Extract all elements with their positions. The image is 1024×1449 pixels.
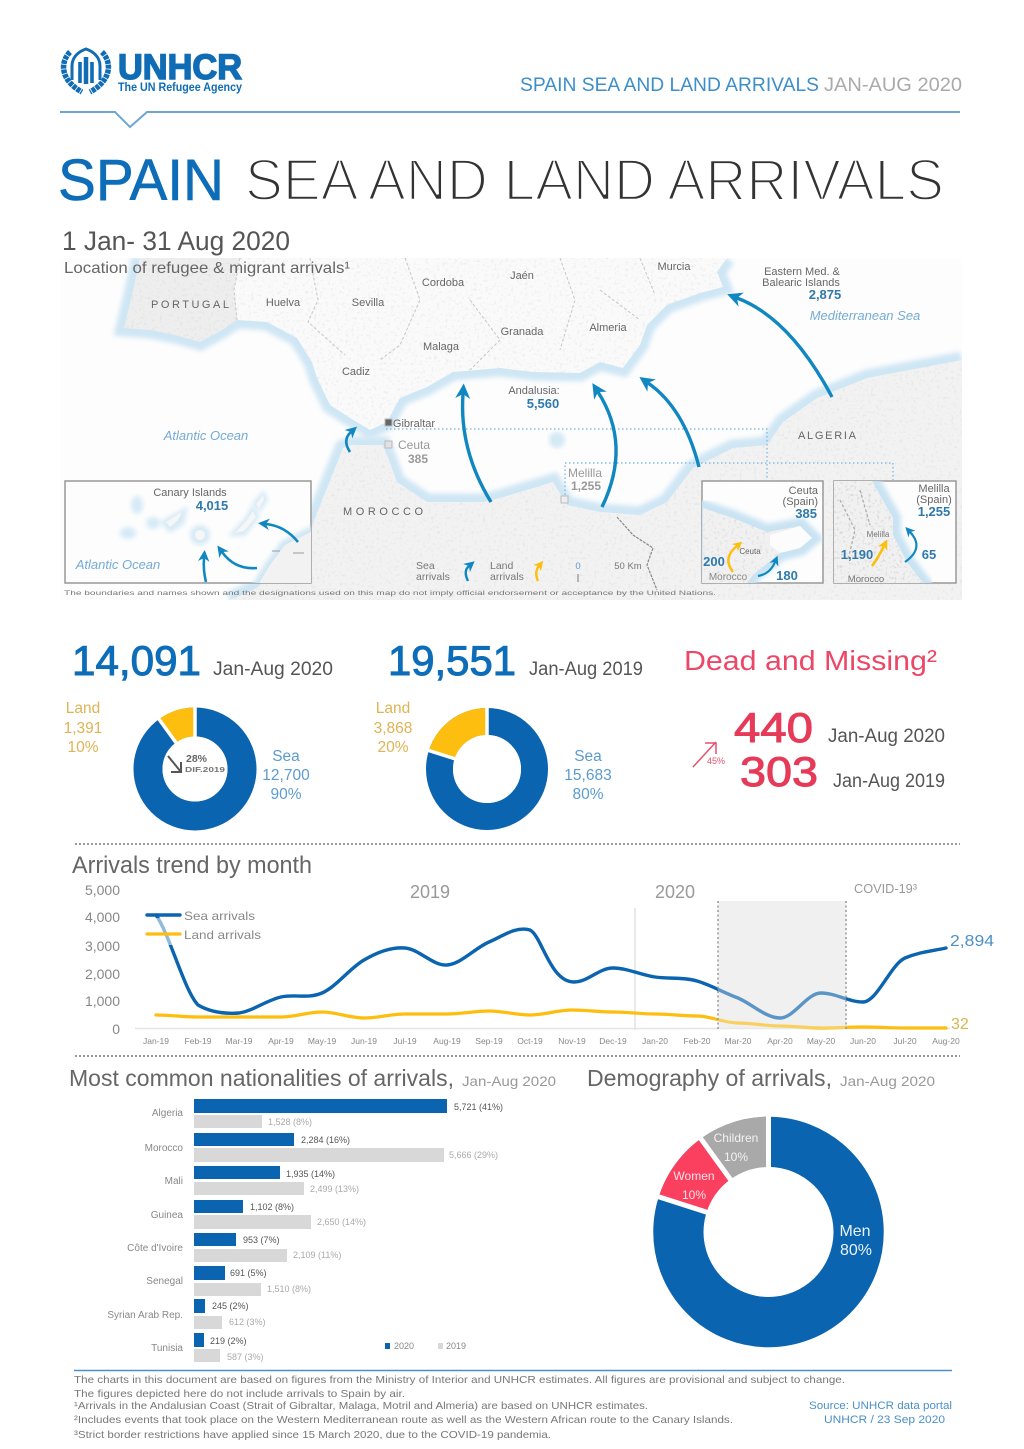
header running title: SPAIN SEA AND LAND ARRIVALS <box>520 75 819 96</box>
footer rule <box>74 1370 952 1372</box>
x axis labels: Mar-19 <box>226 1036 253 1046</box>
inset: Ceuta: 180 <box>776 568 798 583</box>
period labels: COVID-19³ <box>854 881 918 896</box>
source credit <box>809 1400 952 1426</box>
header running title <box>520 75 962 96</box>
sea labels: Atlantic Ocean <box>163 428 248 443</box>
stat: total arrivals 2019: 19,551 <box>388 637 516 684</box>
segment labels: 10% <box>724 1150 748 1164</box>
x axis labels: Jun-19 <box>351 1036 377 1046</box>
y axis labels: 5,000 <box>85 882 120 898</box>
icon: UNHCR emblem <box>64 49 108 92</box>
donut chart: demography <box>643 1106 894 1358</box>
logo tagline: The UN Refugee Agency <box>118 82 243 94</box>
inset: Ceuta: (Spain) <box>783 496 818 508</box>
arrival counts on map: 1,255 <box>571 479 601 493</box>
footer notes <box>74 1374 845 1441</box>
heading: nationalities: Jan-Aug 2020 <box>462 1073 556 1089</box>
x axis labels: Oct-19 <box>517 1036 543 1046</box>
period labels <box>410 881 918 902</box>
period labels: 2019 <box>410 882 450 902</box>
stat: dead and missing figures <box>693 704 945 795</box>
date heading: 1 Jan- 31 Aug 2020 <box>62 226 290 256</box>
stat: dead and missing figures: Jan-Aug 2020 <box>828 726 945 747</box>
inset: Ceuta: Morocco <box>709 572 748 583</box>
labels: 2020 donut <box>64 700 310 803</box>
map legend: 0 <box>575 561 581 572</box>
chart legend: Sea arrivals <box>184 909 255 923</box>
inset: Canary Islands: Atlantic Ocean <box>75 557 160 572</box>
x axis labels: May-20 <box>807 1036 835 1046</box>
end value labels: 2,894 <box>950 933 994 950</box>
value labels: 5,666 (29%) <box>449 1150 498 1160</box>
y axis labels: 3,000 <box>85 938 120 954</box>
map disclaimer: The boundaries and names shown and the designations used on this map do not imply official endorsement or acceptance by the United Nations. <box>64 590 716 597</box>
x axis labels: Jan-19 <box>143 1036 169 1046</box>
footer notes: The figures depicted here do not include arrivals to Spain by air. <box>74 1388 405 1400</box>
footer notes: ²Includes events that took place on the Western Mediterranean route as well as the Western African route to the Canary Islands. <box>74 1414 733 1426</box>
x axis labels: Feb-19 <box>185 1036 212 1046</box>
inset: Melilla <box>834 481 956 585</box>
map place labels: Murcia <box>657 261 691 273</box>
labels: 2019 donut <box>374 700 612 803</box>
main title: SPAIN <box>58 148 224 213</box>
labels: 2020 donut: 12,700 <box>262 767 310 784</box>
map legend: arrivals <box>490 571 524 583</box>
x axis labels: Jul-20 <box>893 1036 917 1046</box>
inset: Ceuta: 200 <box>703 554 725 569</box>
segment labels: Men <box>839 1223 871 1240</box>
sea labels: Mediterranean Sea <box>810 308 920 323</box>
value labels: 1,528 (8%) <box>268 1117 312 1127</box>
x axis labels: Jun-20 <box>850 1036 876 1046</box>
labels: 2019 donut: 15,683 <box>564 767 612 784</box>
arrival counts on map: Ceuta <box>398 438 430 452</box>
end value labels <box>950 933 994 1033</box>
heading: dead and missing: Dead and Missing² <box>684 645 937 676</box>
segment labels: Children <box>714 1131 758 1145</box>
country labels: Tunisia <box>151 1343 183 1354</box>
header: UNHCR logo <box>64 48 243 94</box>
segment labels <box>673 1131 872 1259</box>
x axis labels: May-19 <box>308 1036 336 1046</box>
heading: arrivals trend: Arrivals trend by month <box>72 852 312 879</box>
x axis labels <box>143 1036 960 1046</box>
map legend: Sea <box>416 560 435 572</box>
main title: SEA AND LAND ARRIVALS <box>245 148 944 213</box>
value labels <box>210 1102 503 1362</box>
x axis labels: Nov-19 <box>558 1036 586 1046</box>
y axis labels: 2,000 <box>85 966 120 982</box>
panel: location map <box>60 258 962 600</box>
arrival counts on map <box>398 266 841 493</box>
inset: Ceuta: Ceuta <box>739 547 761 556</box>
country labels: Algeria <box>152 1108 183 1119</box>
bar chart: nationalities <box>107 1099 503 1362</box>
arrival counts on map: 5,560 <box>527 396 559 411</box>
stat: dead and missing figures: Jan-Aug 2019 <box>833 771 945 792</box>
footer notes: The charts in this document are based on figures from the Ministry of Interior and UNHCR estimates. All figures are provisional and subject to change. <box>74 1374 845 1386</box>
x axis labels: Jan-20 <box>642 1036 668 1046</box>
sea arrivals line <box>156 915 946 1018</box>
COVID restriction band <box>718 901 846 1029</box>
x axis labels: Mar-20 <box>725 1036 752 1046</box>
map subtitle: Location of refugee & migrant arrivals¹ <box>64 260 350 277</box>
y axis labels: 0 <box>112 1021 120 1037</box>
x axis labels: Aug-19 <box>433 1036 461 1046</box>
divider <box>75 1055 960 1057</box>
inset: Melilla: Melilla <box>918 483 950 495</box>
map place labels: Gibraltar <box>393 418 435 430</box>
map legend: 50 Km <box>614 561 642 572</box>
bars 2019 <box>194 1115 444 1362</box>
segment labels: 80% <box>840 1242 872 1259</box>
value labels: 953 (7%) <box>243 1235 280 1245</box>
sea labels <box>163 308 920 443</box>
map place labels: Granada <box>501 326 544 338</box>
y axis labels <box>85 882 120 1037</box>
labels: 2020 donut: 10% <box>67 739 99 756</box>
map place labels: Malaga <box>423 341 460 353</box>
inset: Melilla: (Spain) <box>916 494 952 506</box>
x axis labels: Aug-20 <box>932 1036 960 1046</box>
donut chart: 2019 land and sea <box>424 703 547 829</box>
value labels: 1,510 (8%) <box>267 1284 311 1294</box>
country labels <box>107 1108 183 1354</box>
x axis labels: Jul-19 <box>393 1036 417 1046</box>
value labels: 1,935 (14%) <box>286 1169 335 1179</box>
inset: Canary Islands: Canary Islands <box>153 487 227 499</box>
map place labels: Almeria <box>589 322 628 334</box>
value labels: 2,499 (13%) <box>310 1184 359 1194</box>
bar legend <box>385 1341 466 1351</box>
value labels: 587 (3%) <box>227 1352 264 1362</box>
stat: total arrivals 2019: Jan-Aug 2019 <box>529 659 643 680</box>
donut chart: 2020 land and sea: DIF.2019 <box>185 765 225 774</box>
map place labels: PORTUGAL <box>151 299 229 311</box>
y axis labels: 1,000 <box>85 993 120 1009</box>
map place labels: Jaén <box>510 270 534 282</box>
arrival counts on map: Eastern Med. & <box>764 266 841 278</box>
value labels: 5,721 (41%) <box>454 1102 503 1112</box>
x axis labels: Dec-19 <box>599 1036 627 1046</box>
inset: Canary Islands <box>64 480 312 584</box>
y axis labels: 4,000 <box>85 909 120 925</box>
value labels: 612 (3%) <box>229 1317 266 1327</box>
inset: Canary Islands: 4,015 <box>196 498 228 513</box>
country labels: Morocco <box>145 1143 183 1154</box>
band overlay on lines <box>718 901 846 1029</box>
country labels: Senegal <box>146 1276 183 1287</box>
source credit: Source: UNHCR data portal <box>809 1400 952 1412</box>
inset: Ceuta: Ceuta <box>789 485 819 497</box>
stat: total arrivals 2020: Jan-Aug 2020 <box>213 659 333 680</box>
labels: 2019 donut: 20% <box>377 739 409 756</box>
end value labels: 32 <box>951 1016 969 1033</box>
dotted inset guides <box>386 429 893 495</box>
footer notes: ¹Arrivals in the Andalusian Coast (Strait of Gibraltar, Malaga, Motril and Almeria) are based on UNHCR estimates. <box>74 1400 648 1412</box>
map place labels: Cadiz <box>342 366 370 378</box>
arrival counts on map: Andalusia: <box>508 385 560 397</box>
arrow: 45 percent increase: 45% <box>707 756 725 766</box>
country labels: Côte d'Ivoire <box>127 1243 183 1254</box>
value labels: 219 (2%) <box>210 1336 247 1346</box>
segment labels: 10% <box>682 1188 706 1202</box>
heading: demography: Jan-Aug 2020 <box>840 1073 935 1089</box>
map legend <box>416 560 642 583</box>
x axis labels: Sep-19 <box>475 1036 503 1046</box>
map sea and land base <box>60 258 962 600</box>
arrival counts on map: Balearic Islands <box>762 277 840 289</box>
footer notes: ³Strict border restrictions have applied since 15 March 2020, due to the COVID-19 pandemia. <box>74 1429 551 1441</box>
inset: Ceuta: 385 <box>795 506 817 521</box>
logo wordmark: UNHCR <box>118 48 242 87</box>
arrival counts on map: 385 <box>408 452 428 466</box>
labels: 2020 donut: 90% <box>270 786 302 803</box>
land arrivals line <box>156 1010 946 1028</box>
stat: total arrivals 2019 <box>388 637 643 684</box>
inset: Melilla: 1,255 <box>918 504 950 519</box>
segment labels: Women <box>673 1169 715 1183</box>
labels: 2019 donut: Land <box>376 700 410 717</box>
inset: Melilla: 65 <box>922 547 936 562</box>
location markers <box>385 419 568 503</box>
value labels: 1,102 (8%) <box>250 1202 294 1212</box>
labels: 2019 donut: 80% <box>572 786 604 803</box>
x axis labels: Apr-20 <box>767 1036 793 1046</box>
labels: 2020 donut: Land <box>66 700 100 717</box>
arrival counts on map: 2,875 <box>809 287 841 302</box>
donut chart: 2020 land and sea: 28% <box>186 753 208 765</box>
map place labels: ALGERIA <box>798 430 857 442</box>
inset: Melilla: Melilla <box>867 530 890 539</box>
value labels: 2,284 (16%) <box>301 1135 350 1145</box>
labels: 2020 donut: 1,391 <box>64 720 102 737</box>
labels: 2019 donut: 3,868 <box>374 720 412 737</box>
header running title: JAN-AUG 2020 <box>824 75 962 96</box>
inset: Ceuta <box>702 481 823 583</box>
value labels: 691 (5%) <box>230 1268 267 1278</box>
line chart: arrivals trend by month <box>85 881 994 1046</box>
heading: nationalities: Most common nationalities of arrivals, <box>69 1065 454 1091</box>
country labels: Guinea <box>151 1210 183 1221</box>
inset: Melilla: 1,190 <box>841 547 873 562</box>
stat: dead and missing figures: 440 <box>734 704 813 751</box>
bar legend: 2020 <box>394 1341 414 1351</box>
map place labels: Sevilla <box>352 297 385 309</box>
value labels: 245 (2%) <box>212 1301 249 1311</box>
bars 2020 <box>194 1099 447 1347</box>
stat: total arrivals 2020 <box>72 637 333 684</box>
source credit: UNHCR / 23 Sep 2020 <box>824 1414 945 1426</box>
stat: dead and missing figures: 303 <box>740 748 818 795</box>
period labels: 2020 <box>655 882 695 902</box>
chart legend: Land arrivals <box>184 928 261 942</box>
value labels: 2,650 (14%) <box>317 1217 366 1227</box>
stat: total arrivals 2020: 14,091 <box>72 637 201 684</box>
heading: demography: Demography of arrivals, <box>587 1065 832 1091</box>
arrows: sea routes <box>346 298 832 507</box>
map place labels: Huelva <box>266 297 301 309</box>
bar legend: 2019 <box>446 1341 466 1351</box>
divider <box>75 843 960 845</box>
inset: Melilla: Morocco <box>848 574 884 585</box>
value labels: 2,109 (11%) <box>293 1250 341 1260</box>
labels: 2019 donut: Sea <box>574 748 602 765</box>
country labels: Mali <box>165 1176 183 1187</box>
map legend: arrivals <box>416 571 450 583</box>
arrow: 45 percent increase <box>693 742 725 767</box>
header rule with notch <box>60 112 960 127</box>
chart legend <box>147 909 261 942</box>
x axis labels: Apr-19 <box>268 1036 294 1046</box>
labels: 2020 donut: Sea <box>272 748 300 765</box>
x axis labels: Feb-20 <box>684 1036 711 1046</box>
country labels: Syrian Arab Rep. <box>107 1310 183 1321</box>
donut chart: 2020 land and sea <box>129 703 261 835</box>
arrival counts on map: Melilla <box>568 466 602 480</box>
map place labels: Cordoba <box>422 277 465 289</box>
map place labels: MOROCCO <box>343 506 423 518</box>
map place labels <box>151 261 857 518</box>
map legend: Land <box>490 560 514 572</box>
